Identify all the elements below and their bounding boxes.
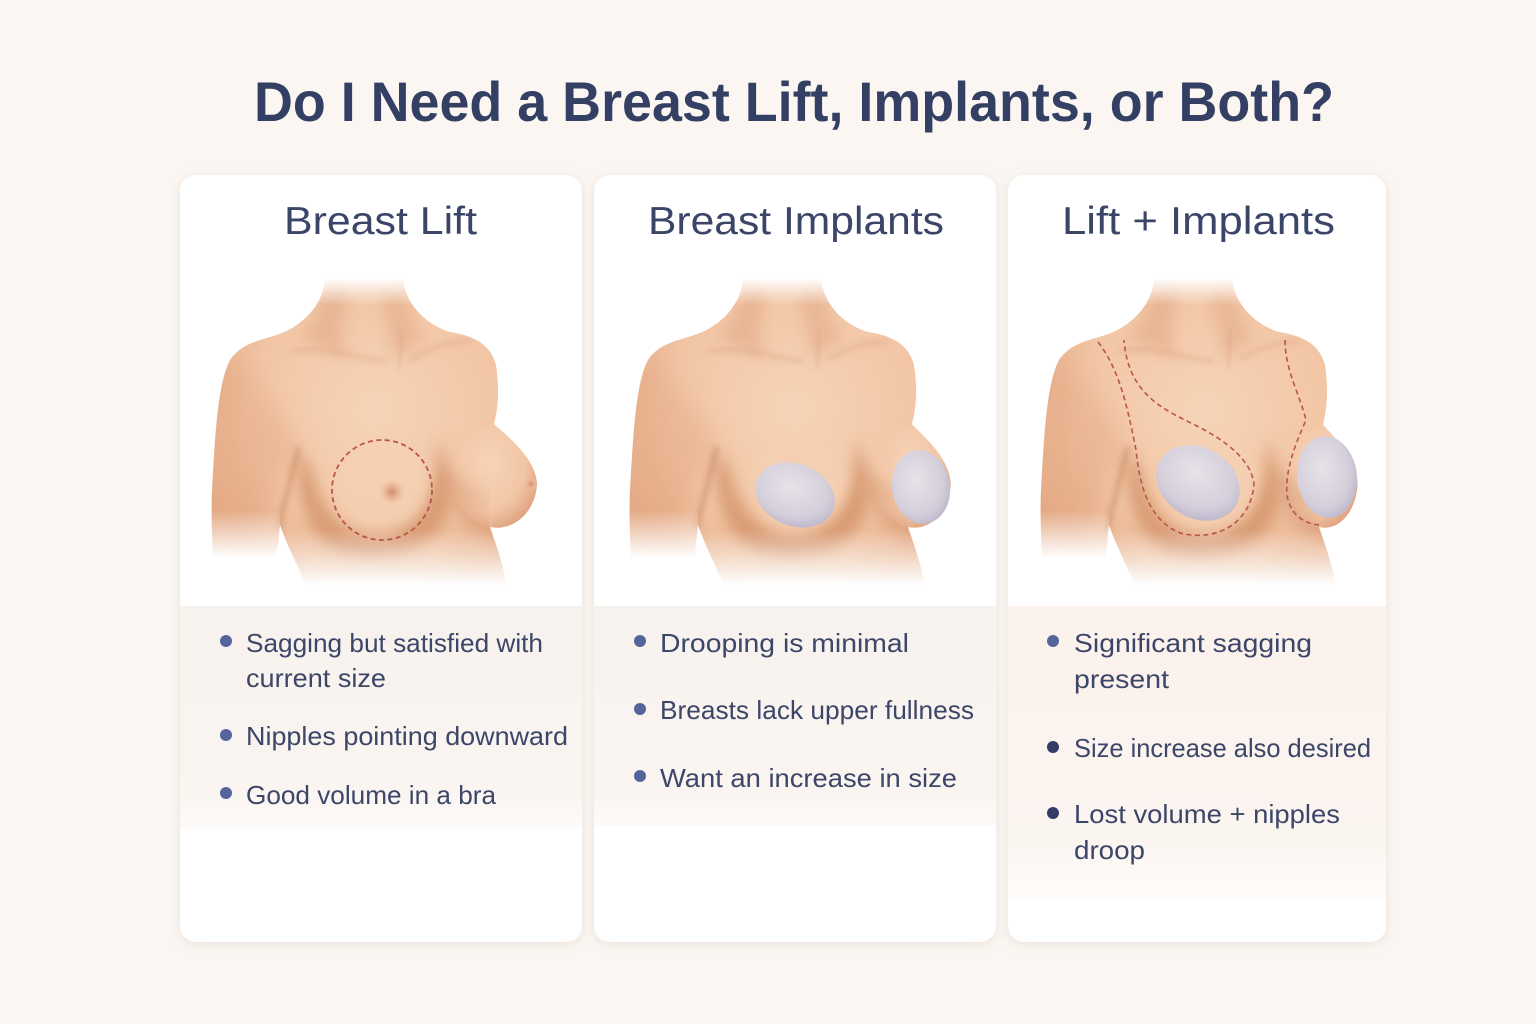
- bullet list: lift plus implants: Lost volume + nipples: [1074, 799, 1340, 829]
- panel: lift plus implants: [1008, 175, 1386, 942]
- bullet list: breast implants: [634, 628, 974, 793]
- bullet list: lift plus implants: Size increase also desired: [1074, 733, 1371, 763]
- bullet list: lift plus implants: Significant sagging: [1074, 628, 1312, 658]
- bullet list: breast lift: Nipples pointing downward: [246, 721, 568, 751]
- bullet list: lift plus implants: present: [1074, 664, 1170, 694]
- heading: breast lift: Breast Lift: [284, 200, 477, 243]
- bullet band: breast implants: [594, 606, 996, 826]
- bullet list: breast lift: Good volume in a bra: [246, 780, 497, 810]
- title: Do I Need a Breast Lift, Implants, or Both?: [254, 70, 1334, 133]
- bullet list: breast implants: Want an increase in size: [660, 763, 957, 793]
- bullet band: lift plus implants: [1008, 606, 1386, 898]
- heading: breast implants: Breast Implants: [648, 200, 944, 243]
- bullet list: lift plus implants: [1047, 628, 1371, 865]
- bullet list: breast implants: Drooping is minimal: [660, 628, 909, 658]
- bullet list: breast lift: Sagging but satisfied with: [246, 628, 543, 658]
- bullet list: lift plus implants: droop: [1074, 835, 1145, 865]
- card: lift plus implants: [1008, 175, 1386, 942]
- heading: lift plus implants: Lift + Implants: [1062, 200, 1335, 243]
- illustration: breast lift torso: [190, 260, 538, 600]
- illustration: breast implants torso: [608, 260, 955, 600]
- illustration: lift plus implants torso: [1019, 260, 1361, 600]
- bullet band: breast lift: [180, 606, 582, 828]
- panel: breast implants: [594, 175, 996, 942]
- bullet list: breast lift: current size: [246, 663, 386, 693]
- panel: breast lift: [180, 175, 582, 942]
- bullet list: breast implants: Breasts lack upper fullness: [660, 695, 974, 725]
- card: breast lift: [180, 175, 582, 942]
- card: breast implants: [594, 175, 996, 942]
- bullet list: breast lift: [220, 628, 568, 810]
